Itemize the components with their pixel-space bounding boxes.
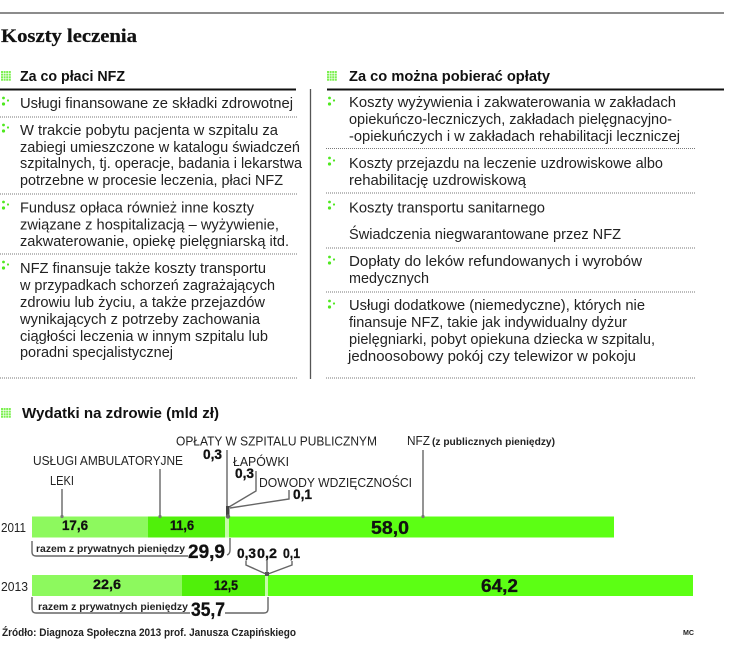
- item: fundusz opłaca: [2, 200, 289, 250]
- item: koszty wyżywienia: -opiekuńczych i w zakładach rehabilitacji leczniczej: [349, 129, 680, 145]
- panel: za co można pobierać opłaty: [326, 68, 724, 378]
- label: opłaty w szpitalu publicznym: OPŁATY W SZPITALU PUBLICZNYM: [176, 434, 377, 448]
- item: w trakcie pobytu: potrzebne w procesie leczenia, płaci NFZ: [20, 173, 283, 189]
- label: łapówki: [229, 454, 289, 507]
- item: usługi dodatkowe: Usługi dodatkowe (niemedyczne), których nie: [349, 298, 645, 314]
- item: usługi dodatkowe: [328, 298, 655, 365]
- item: NFZ finansuje transport: ciągłości leczenia w innym szpitalu lub: [20, 329, 268, 345]
- item: usługi dodatkowe: jednoosobowy pokój czy telewizor w pokoju: [347, 349, 636, 365]
- title: Koszty leczenia: [1, 26, 138, 47]
- bracket: prywatne 2013: [32, 597, 268, 621]
- item: fundusz opłaca: zakwaterowanie, opiekę pielęgniarską itd.: [20, 234, 289, 250]
- label: dowody wdzięczności: 0,1: [293, 487, 312, 502]
- chart: wydatki na zdrowie: [1, 405, 693, 621]
- item: świadczenia niegwarantowane: Świadczenia niegwarantowane przez NFZ: [349, 225, 621, 243]
- label: leki: [50, 473, 74, 518]
- item: NFZ finansuje transport: NFZ finansuje także koszty transportu: [20, 261, 266, 277]
- item: dopłaty do leków: Dopłaty do leków refundowanych i wyrobów: [349, 254, 643, 270]
- bracket: prywatne 2013: razem z prywatnych pieniędzy: [38, 601, 188, 613]
- small values 2013: 0,1: [283, 546, 300, 561]
- item: koszty wyżywienia: Koszty wyżywienia i zakwaterowania w zakładach: [349, 95, 676, 111]
- bracket: prywatne 2011: [32, 538, 230, 563]
- icon: green grid: [2, 71, 10, 81]
- bar 2011: 11,6: [170, 518, 194, 533]
- item: koszty przejazdu: rehabilitację uzdrowiskową: [349, 173, 527, 189]
- small values 2013: [237, 546, 300, 576]
- panel: za co płaci NFZ: [0, 68, 303, 378]
- item: koszty wyżywienia: opiekuńczo-leczniczych, zakładach pielęgnacyjno-: [349, 112, 672, 128]
- item: koszty przejazdu: [328, 156, 663, 189]
- bar 2011: 2011: [1, 520, 26, 535]
- item: koszty przejazdu: Koszty przejazdu na leczenie uzdrowiskowe albo: [349, 156, 663, 172]
- item: fundusz opłaca: związane z hospitalizacją – wyżywienie,: [20, 218, 279, 234]
- item: koszty wyżywienia: [328, 95, 680, 145]
- item: usługi dodatkowe: pielęgniarki, pobyt opiekuna dziecka w szpitalu,: [349, 332, 655, 348]
- item: NFZ finansuje transport: wynikających z potrzeby zachowania: [19, 312, 261, 328]
- bar 2013: 64,2: [481, 576, 518, 596]
- label: leki: LEKI: [50, 473, 74, 488]
- item: usługi dodatkowe: finansuje NFZ, takie jak indywidualny dyżur: [349, 315, 627, 331]
- item: dopłaty do leków: medycznych: [349, 271, 429, 287]
- label: NFZ: NFZ: [407, 433, 430, 448]
- bracket: prywatne 2013: 35,7: [191, 600, 225, 621]
- bar 2013: 2013: [1, 579, 28, 594]
- heading: za co można pobierać opłaty: Za co można pobierać opłaty: [349, 68, 551, 85]
- icon: green grid: [328, 71, 336, 81]
- bracket: prywatne 2011: razem z prywatnych pieniędzy: [36, 543, 185, 555]
- bar 2013: 22,6: [93, 577, 122, 592]
- label: łapówki: 0,3: [235, 466, 254, 481]
- label: opłaty w szpitalu publicznym: [176, 434, 377, 516]
- item: koszty transportu: Koszty transportu sanitarnego: [349, 200, 545, 216]
- label: NFZ: [407, 433, 555, 518]
- item: w trakcie pobytu: zabiegi umieszczone w katalogu świadczeń: [20, 140, 300, 156]
- item: NFZ finansuje transport: poradni specjalistycznej: [20, 345, 173, 361]
- small values 2013: 0,3: [237, 546, 256, 561]
- item: usługi finansowane: Usługi finansowane ze składki zdrowotnej: [20, 96, 293, 112]
- bracket: prywatne 2011: 29,9: [188, 542, 225, 563]
- small values 2013: 0,2: [257, 546, 277, 561]
- source: Źródło: Diagnoza Społeczna 2013 prof. Janusza Czapińskiego: [2, 626, 296, 639]
- label: dowody wdzięczności: DOWODY WDZIĘCZNOŚCI: [259, 475, 412, 490]
- item: dopłaty do leków: [328, 254, 643, 287]
- heading: wydatki na zdrowie: Wydatki na zdrowie (mld zł): [22, 405, 219, 422]
- label: NFZ: (z publicznych pieniędzy): [432, 436, 555, 448]
- item: NFZ finansuje transport: [2, 261, 275, 361]
- item: w trakcie pobytu: [2, 123, 303, 189]
- icon: green grid: [2, 408, 10, 418]
- item: w trakcie pobytu: szpitalnych, tj. operacje, badania i lekarstwa: [20, 156, 303, 172]
- item: w trakcie pobytu: W trakcie pobytu pacjenta w szpitalu za: [20, 123, 279, 139]
- bar 2011: 17,6: [62, 518, 88, 533]
- label: usługi ambulatoryjne: [33, 453, 183, 518]
- item: NFZ finansuje transport: w przypadkach schorzeń zagrażających: [19, 278, 275, 294]
- bar 2013: [1, 575, 693, 596]
- label: dowody wdzięczności: [226, 475, 412, 519]
- item: NFZ finansuje transport: zdrowiu lub życiu, a także przejazdów: [20, 295, 266, 311]
- heading: za co płaci NFZ: Za co płaci NFZ: [20, 68, 125, 85]
- item: fundusz opłaca: Fundusz opłaca również inne koszty: [20, 200, 255, 216]
- label: łapówki: ŁAPÓWKI: [233, 454, 289, 469]
- author mark: MC: [683, 630, 694, 637]
- bar 2013: 12,5: [214, 578, 238, 593]
- label: usługi ambulatoryjne: USŁUGI AMBULATORYJNE: [33, 453, 183, 468]
- label: opłaty w szpitalu publicznym: 0,3: [203, 447, 222, 462]
- bar 2011: [1, 516, 614, 538]
- bar 2011: 58,0: [371, 518, 409, 538]
